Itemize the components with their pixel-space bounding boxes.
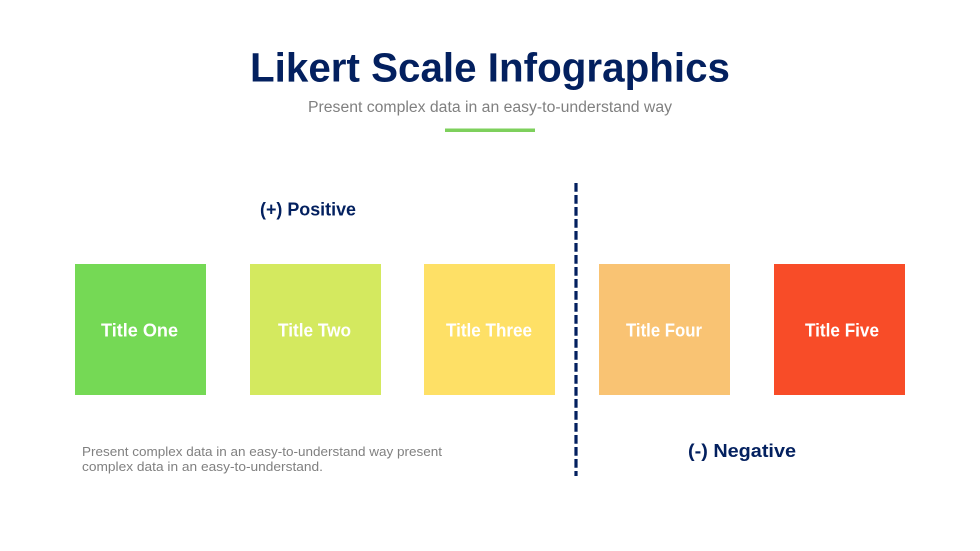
- title underline accent: [445, 128, 535, 132]
- title: Likert Scale Infographics: [250, 44, 730, 90]
- panel: title five: [774, 264, 905, 395]
- positive label: (+) Positive: [260, 200, 356, 220]
- panel: title four: [599, 264, 730, 395]
- panel: title three: Title Three: [446, 320, 532, 340]
- panel: title one: [75, 264, 206, 395]
- dashed divider: [574, 183, 578, 476]
- description text: [82, 444, 442, 474]
- description text: complex data in an easy-to-understand.: [82, 459, 323, 474]
- panel: title four: Title Four: [626, 320, 702, 340]
- subtitle: Present complex data in an easy-to-understand way: [308, 99, 672, 116]
- panel: title two: Title Two: [278, 320, 351, 340]
- panel: title one: Title One: [101, 320, 178, 340]
- panel: title five: Title Five: [805, 320, 879, 340]
- negative label: (-) Negative: [688, 441, 796, 461]
- description text: Present complex data in an easy-to-understand way present: [82, 444, 442, 459]
- panel: title three: [424, 264, 555, 395]
- panel: title two: [250, 264, 381, 395]
